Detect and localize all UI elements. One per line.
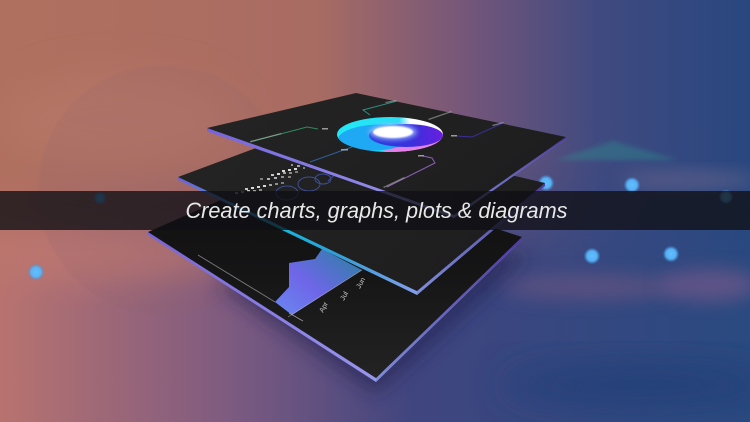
panel: top plate with donut diagram bbox=[207, 93, 566, 218]
axis month labels: Jul bbox=[340, 290, 350, 302]
connector lines bbox=[250, 101, 503, 187]
caption band bbox=[0, 191, 750, 230]
dot matrix and rings bbox=[235, 164, 340, 200]
faint teal triangle bbox=[555, 141, 678, 160]
axis month labels: Apr bbox=[319, 300, 330, 314]
faint background circle bbox=[38, 65, 288, 315]
plate shadow on floor bbox=[215, 250, 530, 395]
panel: middle plate with dot matrix bbox=[178, 128, 545, 295]
axis month labels bbox=[319, 277, 367, 314]
glowing dots bbox=[28, 174, 734, 280]
area chart bbox=[275, 249, 362, 315]
caption text: Create charts, graphs, plots & diagrams bbox=[186, 198, 568, 223]
donut chart bbox=[337, 117, 443, 152]
panel: bottom plate with area chart bbox=[148, 165, 522, 382]
axis month labels: Jun bbox=[356, 277, 367, 290]
small labels bbox=[250, 100, 504, 188]
chart axis lines bbox=[198, 255, 362, 321]
